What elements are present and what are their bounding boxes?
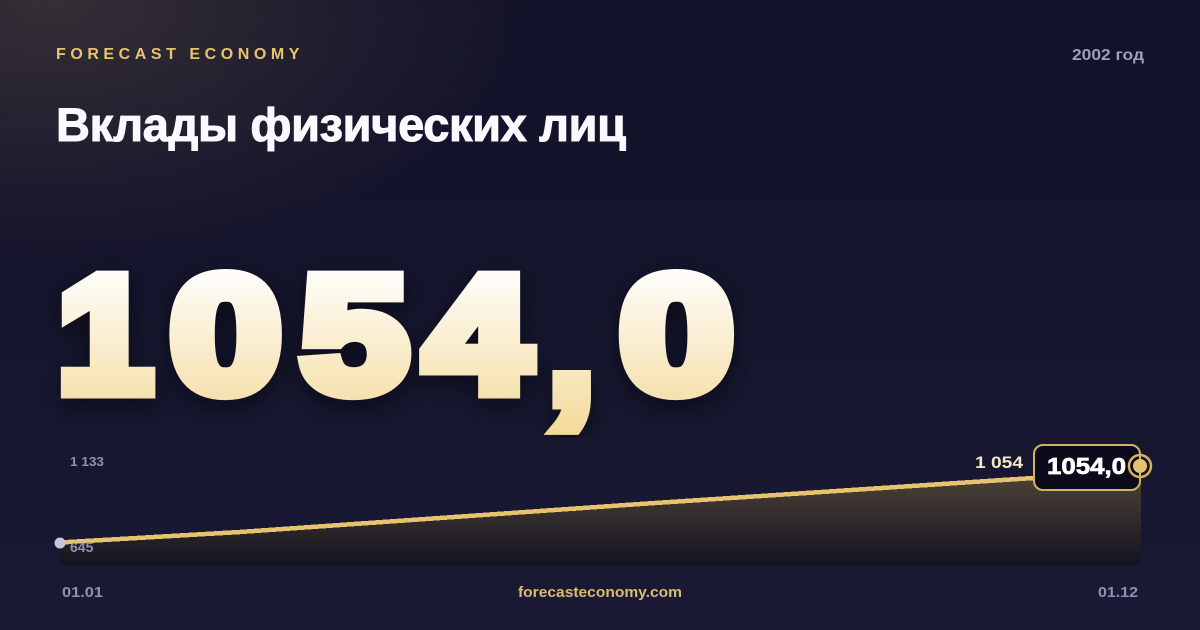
big value: 0: [171, 242, 281, 426]
value tooltip: [1034, 445, 1140, 490]
axis min label: 645: [70, 539, 94, 555]
value tooltip: 1054,0: [1047, 453, 1126, 479]
end point marker: [1129, 455, 1151, 477]
end date: 01.12: [1098, 584, 1138, 601]
last value label: 1 054: [975, 453, 1024, 472]
source site: forecasteconomy.com: [518, 584, 682, 601]
trend line: [60, 474, 1100, 542]
big value: 1: [58, 244, 152, 426]
big value: [60, 269, 736, 438]
big value: ,: [548, 254, 594, 437]
axis max label: 1 133: [70, 454, 104, 469]
title: Вклады физических лиц: [56, 98, 626, 151]
big value: 0: [620, 244, 733, 427]
big value: 5: [301, 242, 408, 426]
year label: 2002 год: [1072, 47, 1144, 64]
start point: [54, 538, 66, 548]
start date: 01.01: [62, 584, 103, 601]
big value: 4: [425, 243, 530, 426]
brand label: FORECAST ECONOMY: [56, 46, 304, 63]
chart: [54, 445, 1151, 565]
area under line: [60, 471, 1141, 565]
